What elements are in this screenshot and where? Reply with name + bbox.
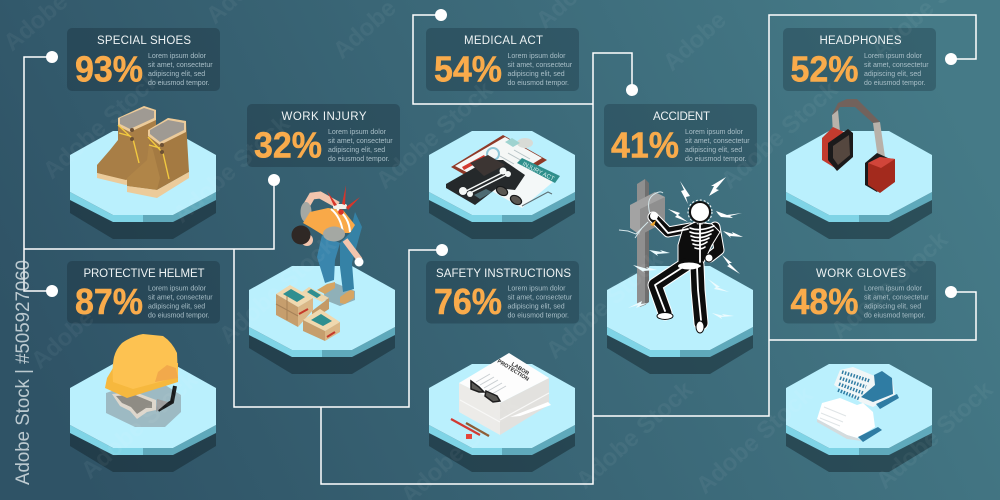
description: Lorem ipsum dolor [508, 286, 566, 292]
description: Lorem ipsum dolor [148, 286, 207, 292]
description: Lorem ipsum dolor [864, 286, 923, 292]
stock watermarks: Adobe Stock [371, 76, 499, 194]
card background [783, 28, 936, 91]
stock watermarks: Adobe Stock [716, 76, 844, 194]
description: Lorem ipsum dolor [328, 129, 387, 136]
stock watermarks: Adobe Stock [571, 376, 699, 494]
card background [67, 261, 220, 324]
icon: boots [97, 106, 189, 198]
stock watermarks: Adobe Stock [168, 110, 296, 228]
percentage: 76% [434, 281, 502, 322]
platform: safety instructions [429, 364, 575, 472]
card background [426, 28, 579, 91]
description: Lorem ipsum dolor [685, 129, 744, 136]
heading: PROTECTIVE HELMET [84, 268, 204, 280]
platform: medical act [429, 131, 575, 239]
description: sit amet, consectetur [508, 62, 573, 69]
heading: WORK GLOVES [816, 268, 906, 280]
card: safety instructions [426, 261, 579, 324]
description: Lorem ipsum dolor [148, 53, 207, 60]
description: do eiusmod tempor. [148, 312, 210, 320]
card background [247, 104, 400, 167]
description: do eiusmod tempor. [148, 80, 210, 87]
description: sit amet, consectetur [508, 294, 573, 302]
description: adipiscing elit, sed [328, 147, 385, 154]
icon: work gloves [817, 367, 899, 442]
description: do eiusmod tempor. [508, 312, 569, 320]
description: sit amet, consectetur [148, 62, 213, 69]
platform: accident [607, 266, 753, 374]
card: headphones [783, 28, 936, 91]
stock id label: Adobe Stock | #505927060 [13, 260, 34, 485]
percentage: 48% [790, 281, 858, 322]
icon: labor protection papers: PROTECTION [496, 359, 530, 383]
description: do eiusmod tempor. [864, 312, 926, 320]
stock watermarks: Adobe Stock [826, 226, 954, 344]
icon: electrocuted skeleton at pole [619, 177, 743, 333]
description: adipiscing elit, sed [864, 304, 921, 310]
card background [426, 261, 579, 324]
stock watermarks: Adobe Stock [691, 381, 819, 499]
description: sit amet, consectetur [864, 62, 929, 69]
description: sit amet, consectetur [864, 294, 929, 302]
description: do eiusmod tempor. [864, 80, 926, 87]
card: work injury [247, 104, 400, 167]
description: Lorem ipsum dolor [864, 53, 923, 60]
platform: protective helmet [70, 364, 216, 472]
icon: labor protection papers: LABOR [510, 362, 530, 377]
card: protective helmet [67, 261, 220, 324]
description: adipiscing elit, sed [508, 304, 565, 310]
heading: SPECIAL SHOES [97, 35, 191, 47]
description: sit amet, consectetur [328, 138, 393, 145]
description: adipiscing elit, sed [508, 71, 565, 78]
platform: headphones [786, 131, 932, 239]
platform: work injury [249, 266, 395, 374]
stock watermarks: Adobe Stock [214, 231, 342, 349]
card: work gloves [783, 261, 936, 324]
icon: medical documents and x-ray [446, 135, 560, 208]
percentage: 93% [75, 48, 143, 90]
heading: HEADPHONES [820, 35, 902, 47]
description: do eiusmod tempor. [508, 80, 569, 87]
card: accident [604, 104, 757, 167]
card background [67, 28, 220, 91]
percentage: 32% [254, 124, 322, 166]
heading: WORK INJURY [282, 111, 367, 123]
description: adipiscing elit, sed [685, 147, 742, 154]
stock watermarks: Adobe Stock [541, 246, 669, 364]
card background [783, 261, 936, 324]
percentage: 52% [790, 48, 858, 90]
stock watermarks: Adobe Stock [76, 366, 204, 484]
icon: headphones [822, 99, 895, 193]
icon: injured worker [276, 185, 364, 341]
heading: SAFETY INSTRUCTIONS [436, 268, 571, 280]
description: sit amet, consectetur [148, 294, 213, 302]
card: special shoes [67, 28, 220, 91]
icon: helmet and goggles [105, 334, 181, 427]
percentage: 54% [434, 48, 502, 90]
stock watermarks: Adobe [26, 304, 100, 374]
description: do eiusmod tempor. [685, 156, 747, 163]
icon: medical documents and x-ray: INJURY ACT [521, 161, 555, 183]
heading: ACCIDENT [653, 111, 710, 123]
stock watermarks: Adobe Stock [38, 66, 166, 184]
stock watermarks: Adobe [658, 6, 732, 76]
description: adipiscing elit, sed [148, 71, 205, 78]
stock watermarks: Adobe Stock [871, 376, 999, 494]
icon: labor protection papers [451, 353, 551, 439]
description: adipiscing elit, sed [148, 304, 205, 310]
card background [604, 104, 757, 167]
card: medical act [426, 28, 579, 91]
heading: MEDICAL ACT [464, 35, 543, 47]
description: adipiscing elit, sed [864, 71, 921, 78]
description: Lorem ipsum dolor [508, 53, 566, 60]
platform: special shoes [70, 131, 216, 239]
description: sit amet, consectetur [685, 138, 750, 145]
percentage: 87% [75, 281, 143, 322]
percentage: 41% [611, 124, 679, 166]
description: do eiusmod tempor. [328, 156, 390, 163]
platform: work gloves [786, 364, 932, 472]
